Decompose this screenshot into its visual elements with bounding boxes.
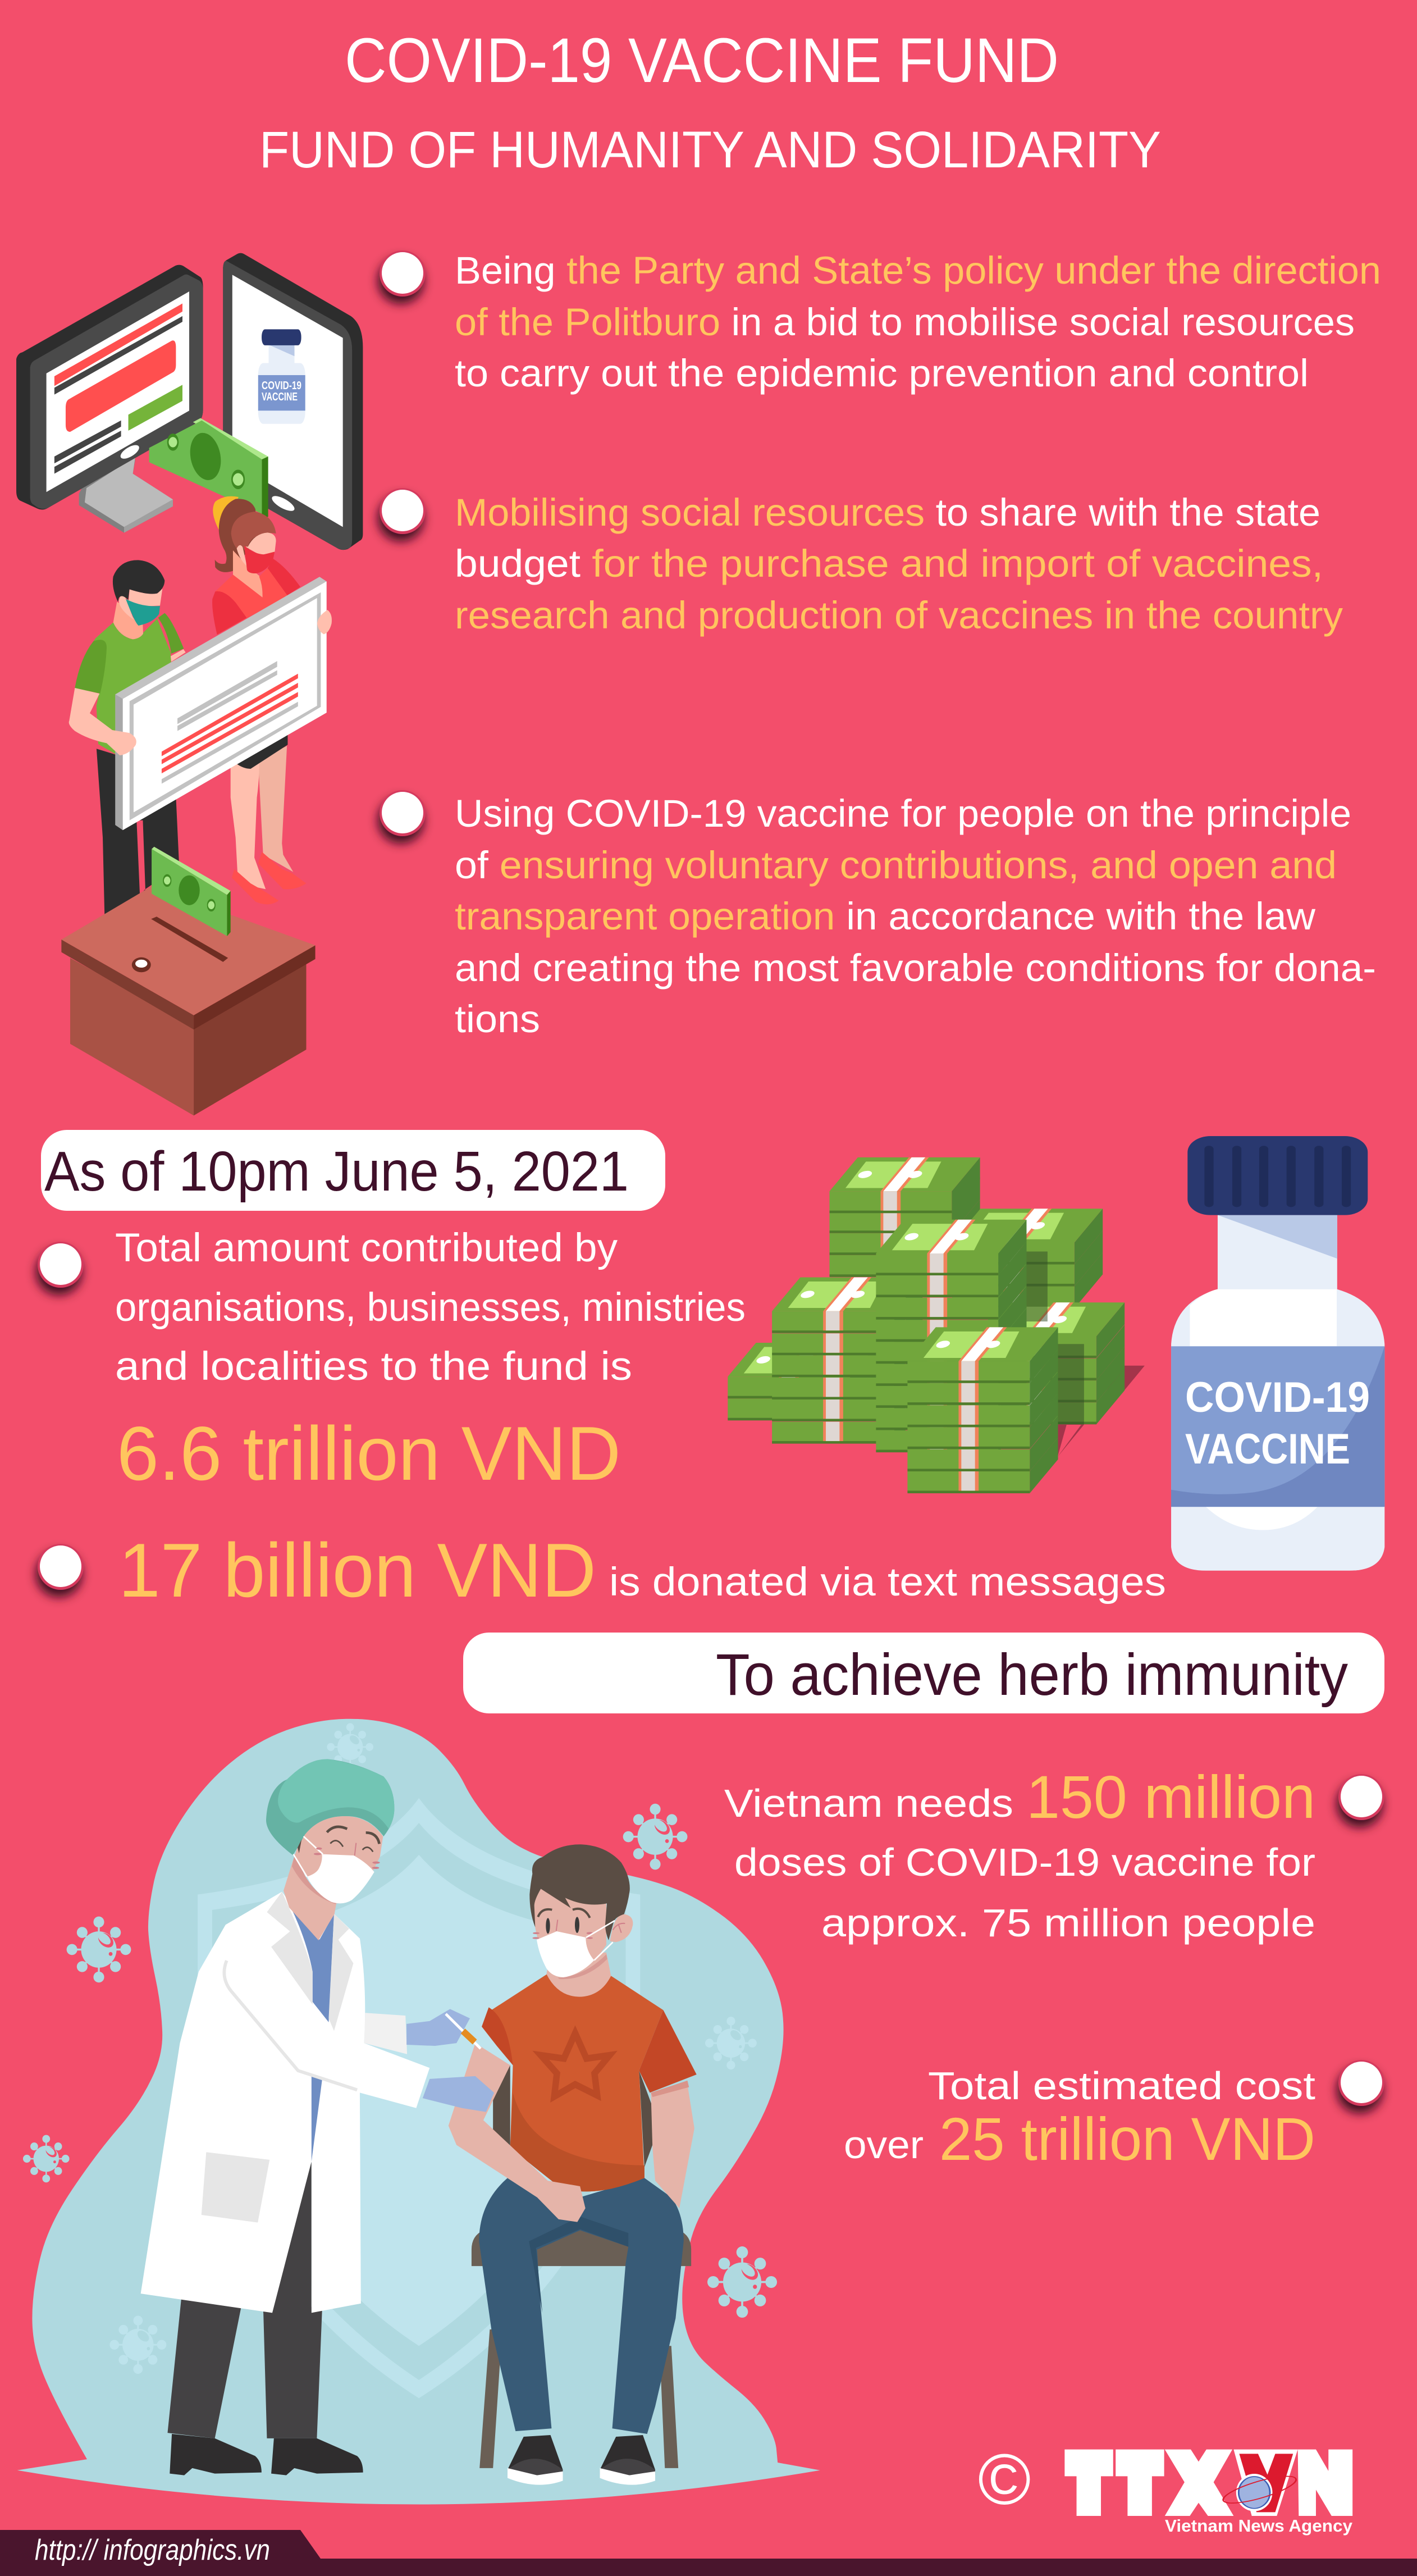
total contributed text: organisations, businesses, ministries — [115, 1285, 746, 1330]
tablet vial label — [262, 380, 301, 403]
doctor trousers and shoes — [167, 2162, 363, 2475]
backdrop blob — [17, 1719, 820, 2505]
vial text — [1185, 1374, 1370, 1473]
patient body — [449, 1975, 697, 2485]
coat cuff — [364, 2013, 407, 2054]
footer bar: http:// infographics.vn — [35, 2534, 270, 2566]
text block 2 — [455, 491, 1343, 637]
text block 3: and creating the most favorable conditions for dona- — [455, 946, 1376, 990]
TTXVN logo: Vietnam News Agency — [1165, 2516, 1353, 2536]
held board — [115, 577, 327, 830]
right text: doses needed: 150 million — [1026, 1763, 1315, 1831]
total contributed text: and localities to the fund is — [115, 1344, 632, 1389]
vial cap — [1187, 1136, 1368, 1215]
TTXVN logo — [1064, 2450, 1353, 2536]
patient head — [529, 1844, 633, 1997]
herd immunity pill — [463, 1633, 1384, 1713]
text block 3: Using COVID-19 vaccine for people on the principle — [455, 792, 1351, 835]
tshirt — [491, 1975, 663, 2191]
jeans — [479, 2178, 684, 2434]
title: COVID-19 VACCINE FUND — [345, 25, 1059, 95]
chair — [472, 2065, 691, 2468]
vial highlight — [1190, 1289, 1337, 1530]
back stack left — [830, 1157, 980, 1277]
money bill behind the couple — [149, 418, 268, 519]
money bill above box — [152, 847, 231, 936]
text block 2: Mobilising social resources to share with the state — [455, 491, 1320, 534]
man head and shirt — [75, 560, 186, 754]
text block 1: Being the Party and State’s policy under the direction — [455, 249, 1381, 292]
viruses — [23, 1723, 777, 2374]
patient shoes — [508, 2435, 655, 2485]
doctor coat — [141, 1892, 429, 2313]
date pill: As of 10pm June 5, 2021 — [44, 1140, 629, 1203]
subtitle: FUND OF HUMANITY AND SOLIDARITY — [259, 121, 1161, 179]
star — [541, 2033, 610, 2096]
illustration: monitors, people and donation box — [16, 253, 363, 1115]
stack shadow — [1058, 1366, 1145, 1457]
stack front — [907, 1327, 1058, 1493]
tablet vial label: VACCINE — [262, 391, 298, 403]
right arm — [651, 2085, 694, 2208]
text block 1: to carry out the epidemic prevention and control — [455, 352, 1309, 395]
copyright symbol: © — [978, 2440, 1031, 2520]
man trousers — [97, 749, 179, 923]
monitor stand — [79, 457, 173, 533]
vial body — [1171, 1289, 1384, 1571]
right text: total cost: over — [844, 2123, 924, 2167]
right text: doses needed: doses of COVID-19 vaccine for — [734, 1840, 1315, 1884]
17 billion VND: 17 billion VND — [118, 1528, 596, 1613]
donation box — [61, 886, 316, 1115]
tablet — [223, 253, 363, 550]
text block 2: research and production of vaccines in the country — [455, 594, 1343, 637]
stack shadow overlays — [1026, 1252, 1084, 1425]
logo red V — [1239, 2454, 1293, 2512]
shield — [198, 1798, 640, 2398]
right text: total cost: 25 trillion VND — [939, 2105, 1315, 2173]
bullet 4 — [36, 1242, 84, 1295]
text block 1: of the Politburo in a bid to mobilise social resources — [455, 300, 1355, 344]
logo letters — [1064, 2450, 1352, 2516]
back stack right — [952, 1209, 1103, 1308]
man — [75, 560, 186, 923]
woman head and torso — [212, 496, 300, 635]
bullet 2 — [378, 488, 426, 541]
text block 2: budget for the purchase and import of vaccines, — [455, 542, 1323, 585]
tablet vial label: COVID-19 — [262, 380, 301, 392]
hands over the board — [69, 610, 332, 755]
vaccination illustration — [17, 1719, 820, 2505]
footer bar — [0, 2530, 1417, 2576]
text block 3: of ensuring voluntary contributions, and open and — [455, 844, 1337, 887]
coat crease — [224, 1961, 357, 2090]
woman — [212, 496, 307, 904]
scrubs — [290, 1905, 334, 2162]
bullet 3 — [378, 790, 426, 844]
bullet 1 — [378, 250, 426, 304]
doctor head — [266, 1759, 394, 1940]
vial label — [1171, 1346, 1384, 1507]
coat pocket — [202, 2152, 269, 2223]
bullet 7 — [1337, 2060, 1384, 2113]
lapels — [267, 1892, 353, 2031]
total contributed text — [115, 1226, 746, 1389]
doctor body — [141, 1892, 429, 2475]
stack small left — [728, 1343, 878, 1420]
stack lower right — [974, 1302, 1125, 1424]
logo globe — [1218, 2472, 1302, 2511]
right text: total cost: Total estimated cost — [928, 2064, 1315, 2108]
text block 3: tions — [455, 997, 540, 1041]
right text: total cost — [844, 2064, 1315, 2173]
bullet 6 — [1337, 1774, 1384, 1827]
right text: doses needed — [724, 1763, 1315, 1945]
text block 1 — [455, 249, 1381, 395]
total contributed text: Total amount contributed by — [115, 1226, 618, 1270]
vial text: COVID-19 — [1185, 1374, 1370, 1421]
donated via text messages: is donated via text messages — [609, 1560, 1166, 1604]
6.6 trillion VND: 6.6 trillion VND — [117, 1411, 621, 1496]
stack left — [772, 1277, 922, 1444]
money stacks — [728, 1157, 1145, 1493]
vaccine vial — [1171, 1136, 1384, 1571]
gloves and syringe — [406, 2009, 494, 2112]
text block 3 — [455, 792, 1376, 1041]
stack centre — [876, 1220, 1026, 1452]
patient left arm — [449, 2043, 586, 2222]
herd immunity pill: To achieve herb immunity — [716, 1642, 1348, 1708]
bullet 5 — [36, 1544, 84, 1597]
vial neck — [1218, 1215, 1337, 1291]
text block 3: transparent operation in accordance with the law — [455, 895, 1315, 938]
desktop monitor — [16, 265, 203, 510]
right text: doses needed: Vietnam needs — [724, 1781, 1013, 1825]
right text: doses needed: approx. 75 million people — [821, 1901, 1315, 1945]
woman legs and shoes — [231, 735, 307, 904]
vial text: VACCINE — [1185, 1425, 1350, 1473]
